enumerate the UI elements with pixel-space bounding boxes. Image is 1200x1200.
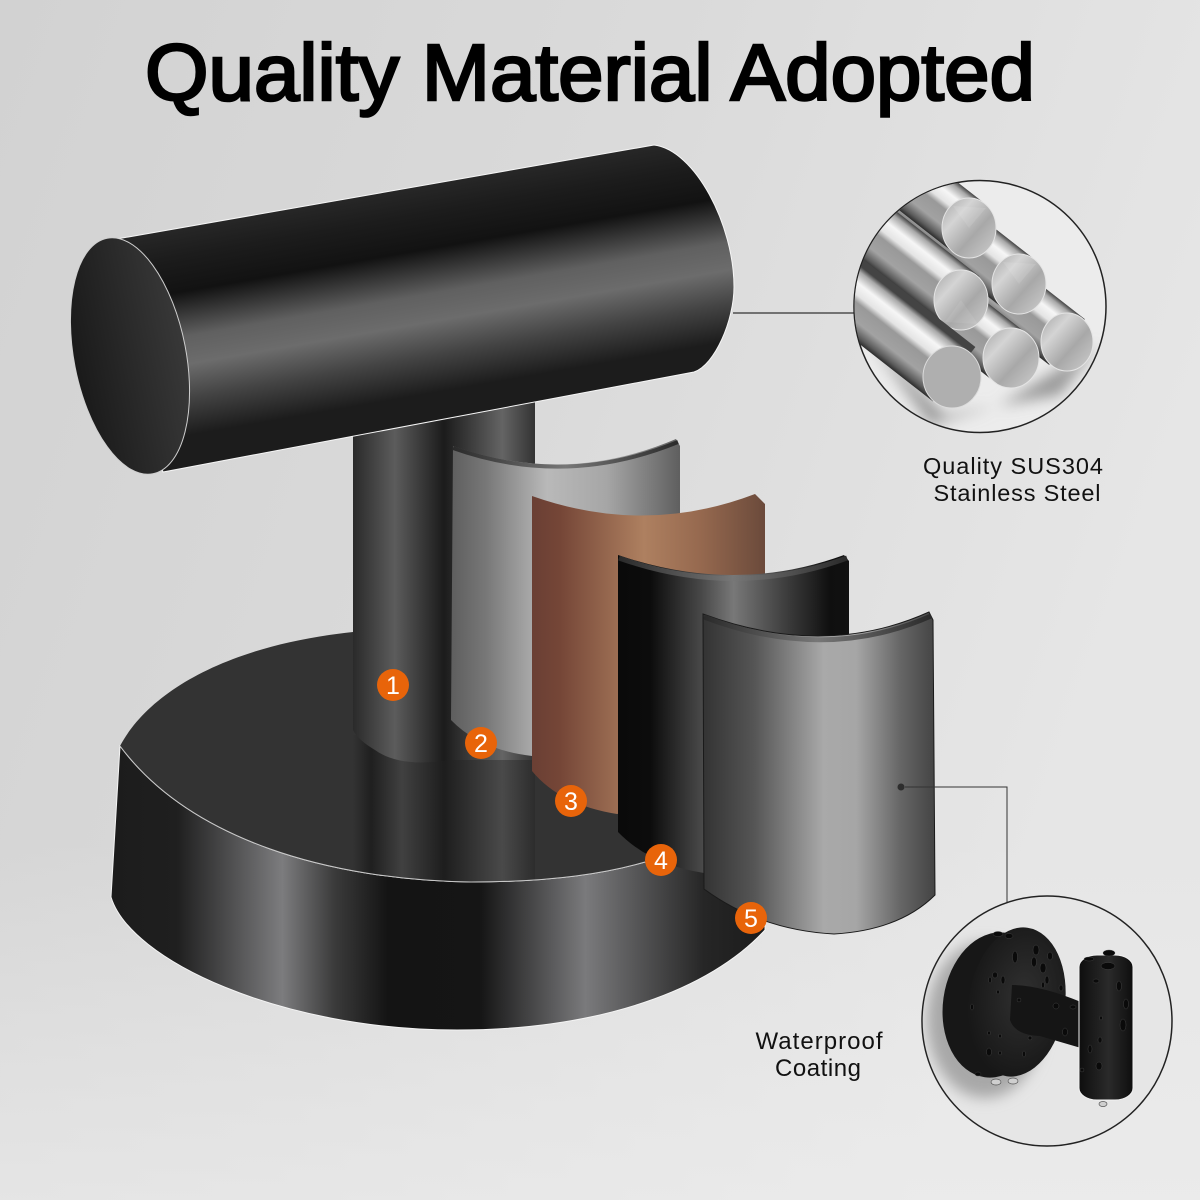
title: Quality Material Adopted [145,28,1035,117]
number badge 1 [377,669,409,701]
caption: waterproof: Waterproof [756,1028,883,1055]
circle: stainless steel rods [853,180,1107,434]
rod: back right [988,288,1085,365]
hook plate back [942,932,1006,1078]
layer 3: copper [532,494,765,814]
product: exploded hook illustration [52,145,935,1030]
rod end: middle right [992,254,1046,314]
number badge 3 [555,785,587,817]
callout line: barrel to steel [733,312,855,314]
stem [353,370,535,762]
barrel end face [52,228,208,484]
number badge 5 [735,902,767,934]
caption: steel: Stainless Steel [934,480,1100,506]
hook base top [120,632,700,882]
layer 5: coating [703,612,935,934]
layer 2: silver [451,439,680,756]
number badge 5: 5 [744,905,758,933]
water drops [970,932,1128,1076]
layer 4: black [618,555,849,873]
hook arm [1010,985,1081,1048]
rod end: back right [1041,313,1093,371]
barrel body [111,145,734,472]
rod end: top [942,198,996,258]
number badge 4: 4 [654,847,668,875]
rod end: middle left [934,270,988,330]
caption: steel [923,453,1103,506]
rod: middle right [892,187,1032,307]
number badge 2: 2 [474,730,488,758]
hook shadow [927,942,1043,1098]
circle: waterproof hook [922,896,1172,1146]
hanging drops [991,1078,1107,1106]
hook base side [111,746,765,1030]
hook plate front [984,927,1066,1077]
caption: steel: Quality SUS304 [923,453,1103,479]
base edge highlight [120,746,645,882]
rod: middle left [864,212,980,319]
rod: bottom left [854,260,976,402]
rod end: bottom middle [983,328,1039,388]
caption: waterproof: Coating [775,1055,861,1082]
rod: top [900,183,982,251]
callout line: coating to waterproof [898,784,1007,903]
number badge 4 [645,844,677,876]
caption: waterproof [756,1028,883,1082]
rod shadow [870,340,1098,425]
hook bar [1079,955,1133,1100]
number badge 2 [465,727,497,759]
stem reflection [360,740,518,881]
rod end: bottom left [923,346,981,408]
number badge 3: 3 [564,788,578,816]
rod: bottom middle [952,304,1022,379]
number badge 1: 1 [386,672,400,700]
